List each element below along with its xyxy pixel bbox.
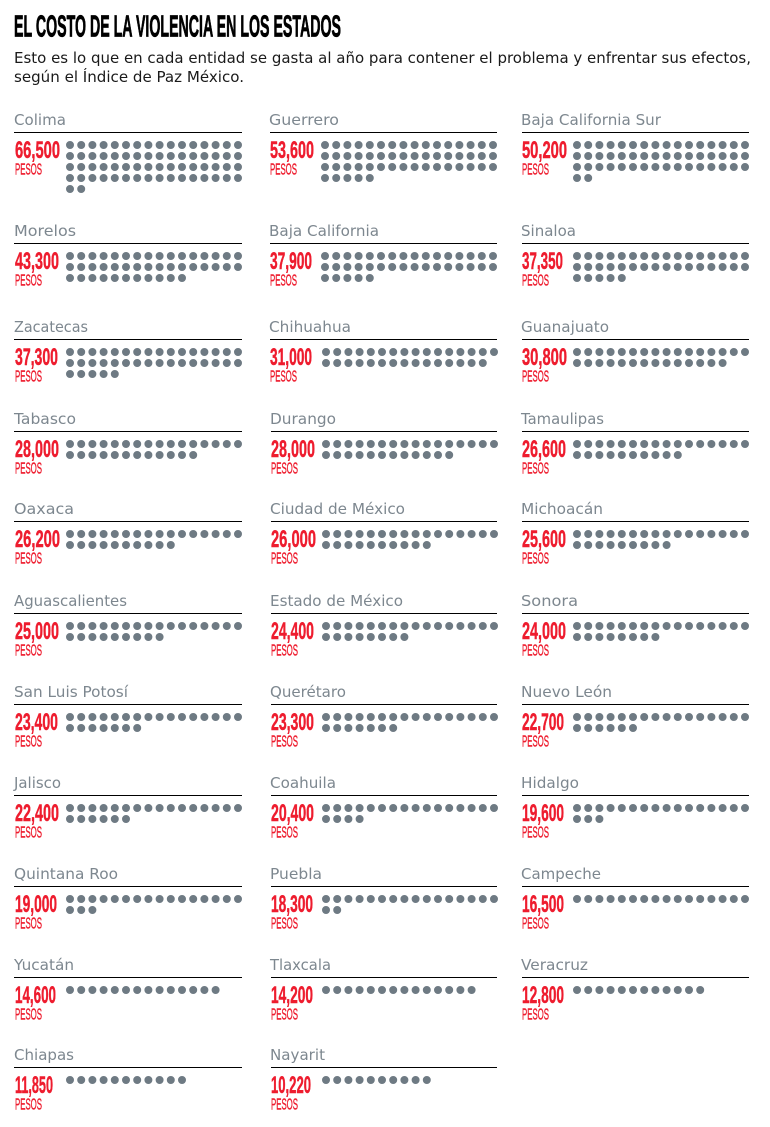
panel: Guerrero — [269, 111, 497, 178]
panel: Quintana Roo — [14, 865, 242, 932]
panel: Hidalgo — [521, 774, 749, 842]
panel: Sinaloa — [521, 222, 749, 290]
panel: Baja California Sur: 50,200 — [522, 137, 567, 164]
panel: Zacatecas — [14, 318, 242, 386]
subtitle: según el Índice de Paz México. — [14, 67, 244, 86]
panel: Colima: Colima — [14, 111, 66, 129]
panel: Yucatán: 14,600 — [15, 982, 56, 1009]
panel: Chiapas: 11,850 — [15, 1072, 53, 1099]
panel: Coahuila: 20,400 — [271, 800, 314, 827]
panel: San Luis Potosí: PESOS — [15, 734, 42, 750]
panel: Morelos: 43,300 — [15, 248, 59, 275]
panel: Sonora: Sonora — [521, 592, 578, 610]
panel: Baja California: PESOS — [270, 272, 297, 290]
panel: Yucatán — [13, 956, 242, 1024]
panel: Michoacán: 25,600 — [522, 526, 566, 553]
panel: Nayarit: 10,220 — [271, 1072, 311, 1099]
panel: Guanajuato: 30,800 — [522, 344, 567, 371]
panel: Estado de México: PESOS — [271, 642, 298, 660]
panel: Veracruz: Veracruz — [521, 956, 588, 974]
panel: Querétaro: 23,300 — [271, 709, 314, 736]
panel: Oaxaca: Oaxaca — [14, 500, 74, 518]
panel: Veracruz — [521, 956, 749, 1024]
panel: Jalisco: 22,400 — [15, 800, 59, 827]
panel: Coahuila: PESOS — [271, 824, 298, 842]
panel: Tabasco: PESOS — [15, 460, 42, 478]
panel: Hidalgo: Hidalgo — [521, 774, 579, 792]
panel: Jalisco — [13, 774, 242, 842]
panel: Michoacán: Michoacán — [521, 500, 603, 518]
panel: Nayarit: PESOS — [271, 1096, 298, 1114]
panel: Zacatecas: 37,300 — [15, 344, 58, 371]
panel: Durango: 28,000 — [271, 436, 315, 463]
panel: Tlaxcala — [269, 956, 497, 1024]
panel: Guerrero: Guerrero — [269, 111, 339, 129]
panel: Baja California — [269, 222, 497, 290]
panel: Tabasco: Tabasco — [13, 410, 76, 428]
panel: Quintana Roo: Quintana Roo — [14, 865, 118, 883]
panel: Nayarit — [270, 1046, 497, 1114]
panel: San Luis Potosí: San Luis Potosí — [14, 683, 129, 701]
panel: Campeche: PESOS — [522, 916, 549, 932]
panel: Quintana Roo: PESOS — [15, 916, 42, 932]
panel: Michoacán: PESOS — [522, 550, 549, 568]
panel: Yucatán: PESOS — [15, 1006, 42, 1024]
panel: Sinaloa: 37,350 — [522, 248, 563, 275]
panel: Oaxaca — [14, 500, 242, 568]
panel: Guanajuato — [521, 318, 749, 386]
panel: Chihuahua: PESOS — [270, 368, 297, 386]
panel: Tlaxcala: 14,200 — [271, 982, 313, 1009]
panel: Puebla: PESOS — [271, 916, 298, 932]
panel: San Luis Potosí: 23,400 — [15, 709, 58, 736]
panel: Morelos — [14, 222, 242, 290]
panel: Guerrero: PESOS — [270, 162, 297, 178]
panel: Tamaulipas: 26,600 — [522, 436, 566, 463]
panel: Durango — [270, 410, 497, 478]
panel: Baja California: Baja California — [269, 222, 379, 240]
panel: Aguascalientes: 25,000 — [15, 618, 59, 645]
panel: Nayarit: Nayarit — [270, 1046, 325, 1064]
panel: Nuevo León: 22,700 — [522, 709, 564, 736]
panel: Morelos: Morelos — [14, 222, 76, 240]
panel: San Luis Potosí — [14, 683, 242, 750]
panel: Ciudad de México: 26,000 — [271, 526, 316, 553]
panel: Estado de México: 24,400 — [271, 618, 314, 645]
panel: Sonora: 24,000 — [522, 618, 566, 645]
panel: Oaxaca: PESOS — [15, 550, 42, 568]
panel: Tlaxcala: Tlaxcala — [269, 956, 331, 974]
panel: Chihuahua: Chihuahua — [269, 318, 351, 336]
panel: Querétaro: PESOS — [271, 734, 298, 750]
panel: Tabasco: 28,000 — [15, 436, 59, 463]
subtitle — [14, 49, 751, 86]
panel: Morelos: PESOS — [15, 272, 42, 290]
panel: Oaxaca: 26,200 — [15, 526, 60, 553]
panel: Sinaloa: PESOS — [522, 272, 549, 290]
panel: Chihuahua — [269, 318, 497, 386]
panel: Coahuila — [270, 774, 497, 842]
panel: Michoacán — [521, 500, 749, 568]
panel: Campeche: Campeche — [521, 865, 601, 883]
panel: Colima: PESOS — [15, 162, 42, 178]
panel: Veracruz: PESOS — [522, 1006, 549, 1024]
panel: Puebla: Puebla — [270, 865, 322, 883]
panel: Nuevo León: Nuevo León — [521, 683, 612, 701]
panel: Guerrero: 53,600 — [270, 137, 314, 164]
panel: Campeche: 16,500 — [522, 891, 564, 918]
panel: Ciudad de México: Ciudad de México — [270, 500, 405, 518]
panel: Tamaulipas: PESOS — [522, 460, 549, 478]
panel: Chiapas: Chiapas — [14, 1046, 74, 1064]
panel: Aguascalientes: Aguascalientes — [14, 592, 127, 610]
panel: Chiapas — [14, 1046, 242, 1114]
panel: Jalisco: Jalisco — [13, 774, 61, 792]
panel: Aguascalientes: PESOS — [15, 642, 42, 660]
panel: Nuevo León — [521, 683, 749, 750]
panel: Puebla: 18,300 — [271, 891, 313, 918]
panel: Hidalgo: 19,600 — [522, 800, 564, 827]
panel: Tamaulipas — [520, 410, 749, 478]
panel: Tamaulipas: Tamaulipas — [520, 410, 604, 428]
panel: Sonora: PESOS — [522, 642, 549, 660]
panel: Sinaloa: Sinaloa — [521, 222, 576, 240]
panel: Puebla — [270, 865, 497, 932]
panel: Querétaro — [270, 683, 497, 750]
panel: Querétaro: Querétaro — [270, 683, 346, 701]
panel: Colima: 66,500 — [15, 137, 60, 164]
panel: Baja California Sur: Baja California Sur — [521, 111, 662, 129]
panel: Hidalgo: PESOS — [522, 824, 549, 842]
panel: Nuevo León: PESOS — [522, 734, 549, 750]
panel: Sonora — [521, 592, 749, 660]
panel: Campeche — [521, 865, 749, 932]
panel: Chihuahua: 31,000 — [270, 344, 312, 371]
panel: Durango: PESOS — [271, 460, 298, 478]
panel: Guanajuato: Guanajuato — [521, 318, 609, 336]
panel: Zacatecas: PESOS — [15, 368, 42, 386]
panel: Ciudad de México: PESOS — [271, 550, 298, 568]
panel: Coahuila: Coahuila — [270, 774, 336, 792]
panel: Yucatán: Yucatán — [13, 956, 74, 974]
panel: Aguascalientes — [14, 592, 242, 660]
subtitle: Esto es lo que en cada entidad se gasta al año para contener el problema y enfrentar sus efectos, — [14, 49, 751, 67]
panel: Baja California Sur: PESOS — [522, 162, 549, 178]
panel: Jalisco: PESOS — [15, 824, 42, 842]
panel: Estado de México: Estado de México — [270, 592, 403, 610]
text: EL COSTO DE LA VIOLENCIA EN LOS ESTADOS — [14, 8, 341, 44]
panel: Baja California: 37,900 — [270, 248, 312, 275]
panel: Tlaxcala: PESOS — [271, 1006, 298, 1024]
panel: Tabasco — [13, 410, 242, 478]
panel: Durango: Durango — [270, 410, 336, 428]
panel: Chiapas: PESOS — [15, 1096, 42, 1114]
panel: Veracruz: 12,800 — [522, 982, 564, 1009]
panel: Estado de México — [270, 592, 497, 660]
panel: Zacatecas: Zacatecas — [14, 318, 88, 336]
panel: Colima — [14, 111, 242, 189]
panel: Ciudad de México — [270, 500, 497, 568]
panel: Baja California Sur — [521, 111, 749, 178]
panel: Quintana Roo: 19,000 — [15, 891, 57, 918]
panel: Guanajuato: PESOS — [522, 368, 549, 386]
